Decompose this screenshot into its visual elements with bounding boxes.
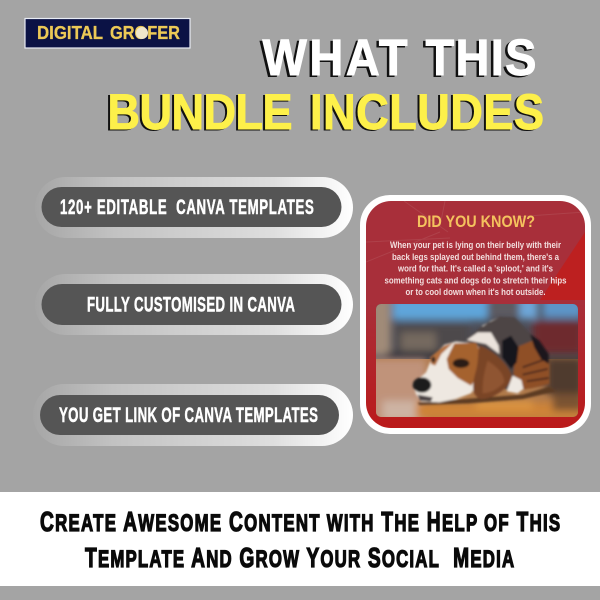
title: bundle includes bbox=[106, 85, 544, 142]
pill: you get link of canva templates: YOU GET LINK OF CANVA TEMPLATES bbox=[59, 403, 318, 427]
title: what this: WHAT bbox=[262, 30, 408, 86]
title: what this: THIS bbox=[423, 32, 534, 88]
text block: sploot fact: back legs splayed out behind them, there's a bbox=[392, 252, 560, 262]
logo: Digital Grofer: DIGITAL bbox=[37, 23, 103, 43]
heading: did you know: DID YOU KNOW? bbox=[417, 212, 535, 231]
pill: you get link of canva templates bbox=[33, 384, 353, 446]
text block: sploot fact: word for that. It's called a 'sploot,' and it's bbox=[397, 264, 553, 274]
pill: fully customised in canva bbox=[35, 274, 353, 335]
title: bundle includes: BUNDLE bbox=[108, 85, 293, 141]
banner line 2: TEMPLATE AND GROW YOUR SOCIAL MEDIA bbox=[85, 544, 514, 574]
text block: sploot fact bbox=[384, 240, 566, 297]
title: bundle includes: BUNDLE bbox=[106, 86, 291, 142]
logo: Digital Grofer: GROFER bbox=[110, 23, 180, 43]
title: bundle includes: INCLUDES bbox=[310, 85, 544, 141]
photo: beagle lying on floor bbox=[376, 304, 578, 417]
text block: sploot fact: When your pet is lying on their belly with their bbox=[390, 240, 561, 250]
banner: white call to action bbox=[0, 492, 600, 586]
dog bbox=[413, 317, 556, 405]
panel: did you know card bbox=[360, 195, 591, 434]
pill: 120+ editable canva templates bbox=[35, 177, 353, 238]
pill: fully customised in canva: FULLY CUSTOMISED IN CANVA bbox=[87, 292, 295, 316]
text block: sploot fact: something cats and dogs do to stretch their hips bbox=[384, 276, 566, 286]
banner line 1: CREATE AWESOME CONTENT WITH THE HELP OF THIS bbox=[40, 508, 560, 538]
title: bundle includes: INCLUDES bbox=[308, 86, 542, 142]
title: what this: THIS bbox=[426, 30, 536, 86]
title: what this: WHAT bbox=[260, 32, 405, 88]
text block: sploot fact: or to cool down when it's hot outside. bbox=[406, 287, 546, 297]
logo: Digital Grofer bbox=[25, 18, 190, 48]
title: what this bbox=[260, 30, 536, 88]
pill: 120+ editable canva templates: 120+ EDITABLE CANVA TEMPLATES bbox=[60, 195, 314, 219]
